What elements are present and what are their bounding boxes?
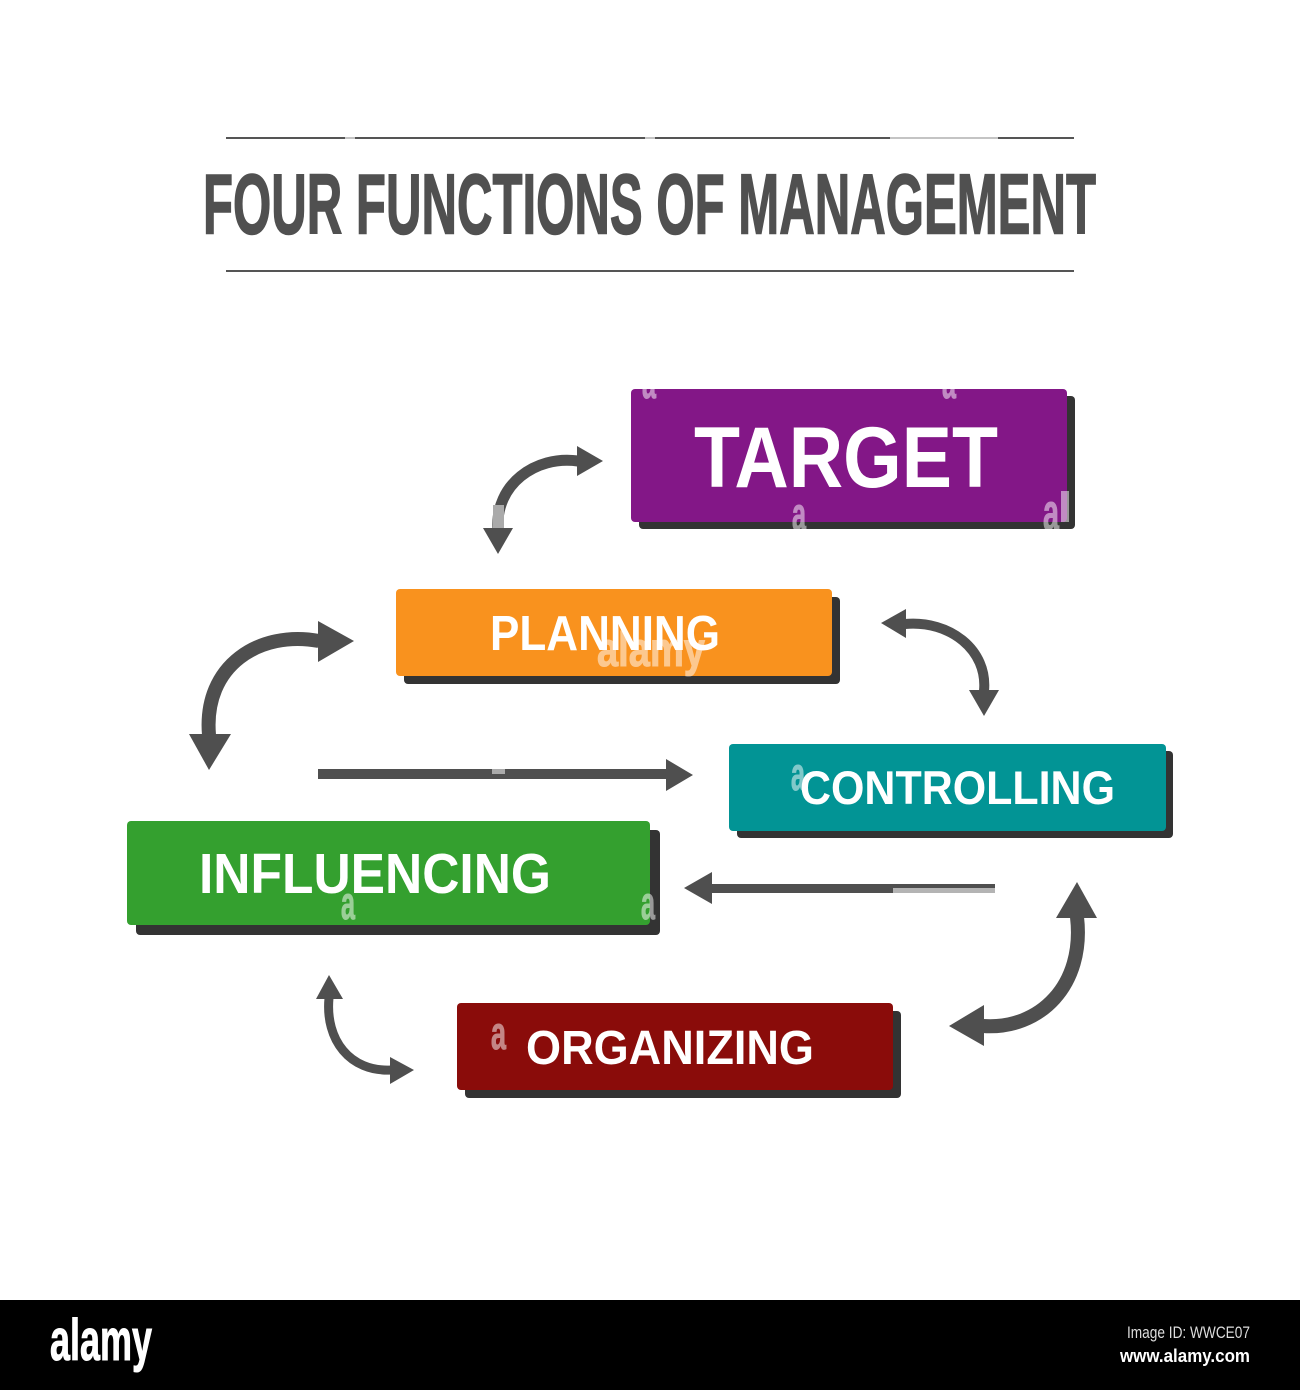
arrow: controlling to organizing	[949, 882, 1097, 1046]
arrow: influencing to controlling	[318, 759, 693, 791]
box: controlling: a	[791, 748, 805, 800]
box: target: a	[792, 488, 806, 540]
box: organizing: a	[491, 1007, 506, 1059]
box: organizing	[457, 1003, 901, 1098]
arrow: target to planning	[483, 446, 603, 554]
box: planning	[396, 589, 840, 684]
box: target: a	[1043, 484, 1060, 542]
box: influencing	[127, 821, 660, 935]
box: influencing: a	[341, 877, 355, 929]
box: organizing: ORGANIZING	[526, 1022, 814, 1075]
box: controlling: CONTROLLING	[800, 761, 1115, 814]
box: target: a	[942, 356, 956, 408]
box: target	[631, 356, 1075, 542]
box: planning: alamy	[597, 624, 705, 677]
arrow: planning to controlling	[881, 609, 999, 716]
box: influencing: a	[641, 877, 655, 929]
footer bar	[0, 1300, 1300, 1390]
arrow: influencing to organizing	[316, 975, 414, 1084]
footer logo: alamy	[50, 1308, 152, 1373]
website: www.alamy.com	[1119, 1346, 1250, 1366]
arrow: planning to influencing	[189, 621, 354, 770]
image id: Image ID: WWCE07	[1127, 1323, 1250, 1342]
box: controlling	[729, 744, 1173, 838]
box: influencing: INFLUENCING	[199, 842, 551, 906]
arrow: controlling to influencing	[684, 872, 995, 904]
box: target: a	[642, 356, 656, 408]
box: target: TARGET	[694, 410, 998, 506]
box: planning: PLANNING	[490, 607, 720, 661]
